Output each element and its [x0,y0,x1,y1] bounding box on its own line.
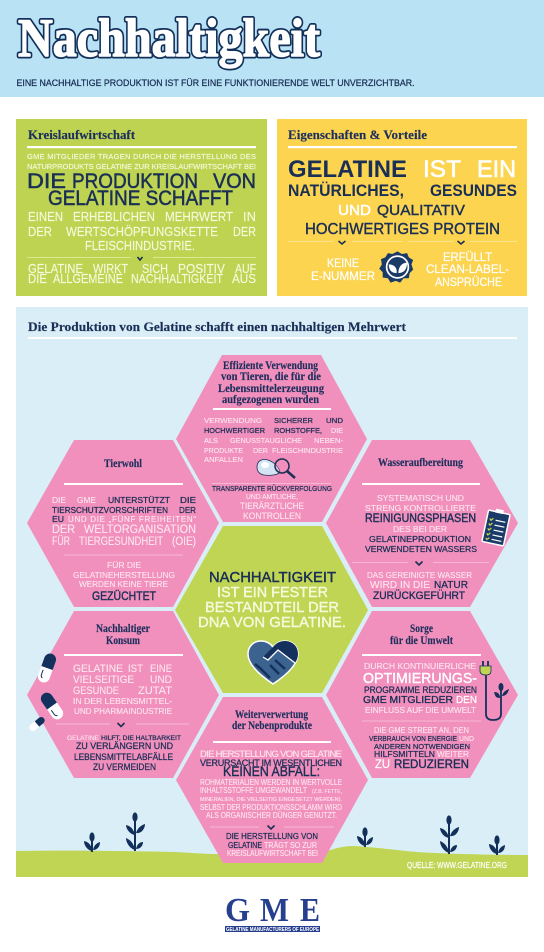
body text: IN DER LEBENSMITTEL- [73,696,172,706]
heading: Sorge [410,623,433,635]
body text: PROGRAMME REDUZIEREN [364,685,477,695]
title: Nachhaltigkeit [18,8,320,68]
conclusion text [226,831,318,858]
logo: GME [225,892,320,933]
icon: plant 2 [126,812,145,851]
heading: Effiziente Verwendung [223,360,318,372]
intro text [27,152,256,171]
arrow [268,826,274,829]
heading: Nachhaltiger [96,623,150,635]
conclusion text: KREISLAUFWIRTSCHAFT BEI [227,849,318,858]
body text: VERWENDETEN WASSERS [365,544,477,554]
body text: SYSTEMATISCH UND [377,493,464,503]
icon: capsule 3 [28,716,46,732]
hexagon: Wasseraufbereitung [326,440,518,607]
conclusion text: KONTROLLEN [243,511,301,521]
heading: nachhaltiger Mehrwert: Die Produktion von Gelatine schafft einen nachhaltigen Mehrwert [28,319,407,334]
heading: Wasseraufbereitung [378,457,463,469]
body text: GENUSSTAUGLICHE [230,436,302,445]
arrow: right [458,241,464,244]
hexagon: effiziente Verwendung [176,355,367,522]
body text: ROHMATERIALIEN WERDEN IN WERTVOLLE [200,778,342,787]
conclusion text [212,484,332,521]
conclusion text: VERBRAUCH VON ENERGIE [369,734,457,743]
heading [96,623,150,647]
conclusion text: GELATINE [67,735,100,742]
icon: capsule 2 [38,690,66,722]
conclusion text: WIRKT [93,262,128,276]
body text: REINIGUNGSPHASEN [365,511,476,525]
statement text [288,156,517,238]
hexagon: Weiterverwertung [176,697,368,863]
body text: DEN [456,694,477,706]
statement text: NACHHALTIGKEIT [209,569,336,586]
text: Clean-Label [426,250,509,289]
body text: (OIE) [172,536,196,548]
heading: aufgezogenen wurden [222,394,320,406]
conclusion text [28,262,256,286]
conclusion text: ALLGEMEINE [53,272,123,286]
conclusion text: AUS [232,272,256,286]
body text: (Z.B. FETTE, [312,789,342,795]
value text: MEHRWERT [165,209,233,224]
body text: UND [150,674,172,686]
panel: Eigenschaften und Vorteile [277,119,527,296]
subtitle: EINE NACHHALTIGE PRODUKTION IST FÜR EINE FUNKTIONIERENDE WELT UNVERZICHTBAR. [16,78,414,89]
body text: DER [52,524,75,536]
heading: Weiterverwertung [235,709,308,721]
heading [232,709,312,732]
conclusion text: HILFSMITTELN [374,749,435,759]
arrow [118,723,124,726]
conclusion text: DIE HERSTELLUNG VON [226,831,318,841]
conclusion text: AUF [235,262,256,276]
heading: Lebensmittelerzeugung [218,383,324,395]
key statement: PRODUKTION [72,170,198,193]
statement text: NATÜRLICHES, [288,181,404,200]
body text: FÜR [52,536,70,548]
title: Nachhaltigkeit [18,8,320,68]
conclusion text: GEZÜCHTET [92,589,157,603]
statement text: IST EIN FESTER [217,584,328,601]
heading [390,623,453,647]
body text: FLEISCHINDUSTRIE [272,446,343,455]
body text: PRODUKTE [204,446,243,455]
panel: nachhaltiger Mehrwert [16,307,528,877]
value text: WERTSCHÖPFUNGSKETTE [66,224,218,239]
value text: DER [28,224,52,239]
text: keine E-Nummer [311,256,375,283]
value text [28,209,256,253]
conclusion text: UND [459,734,475,743]
logo: GME: GELATINE MANUFACTURERS OF EUROPE [226,927,320,933]
conclusion text: POSITIV [178,262,226,276]
body text: DER [179,506,196,515]
statement text: BESTANDTEIL DER [205,599,339,616]
key statement: GELATINE SCHAFFT [48,187,233,210]
text: Clean-Label: ERFÜLLT [443,250,493,264]
body text: GESUNDE [73,685,119,697]
statement text: QUALITATIV [377,202,465,219]
conclusion text: DIE [28,272,47,286]
conclusion text: NATUR [434,580,468,591]
icon: plant 5 [489,835,505,855]
body text: INHALTSSTOFFE UMGEWANDELT [200,786,307,795]
heading [218,360,324,406]
statement text: IST [423,156,461,183]
conclusion text: NACHHALTIGKEIT [131,272,223,286]
hexagon: Tierwohl [27,440,219,607]
body text: GME [77,496,96,505]
body text: UND PHARMAINDUSTRIE [74,706,172,716]
body text: DES BEI DER [393,525,447,534]
conclusion text: ZU [375,757,390,771]
heading: Konsum [106,635,140,647]
body text: ALS [204,436,218,445]
body text: VERWENDUNG [204,416,262,425]
intro text: GME MITGLIEDER TRAGEN DURCH DIE HERSTELLUNG DES [27,152,256,161]
key statement: VON [213,170,256,193]
statement text: GELATINE [288,156,407,183]
body text: EINFLUSS AUF DIE UMWELT [365,706,476,715]
text: Clean-Label: CLEAN-LABEL- [426,262,509,276]
body text: EINE [150,663,172,675]
body text: NEBEN- [314,436,344,445]
conclusion text: ANDEREN NOTWENDIGEN [374,742,470,751]
hexagon: Nachhaltigkeit centre [175,526,368,693]
value text: EINEN [28,209,63,224]
conclusion text: WIRD IN DIE [370,580,430,591]
conclusion text: FÜR DIE [107,560,141,570]
conclusion text: TRANSPARENTE RÜCKVERFOLGUNG [212,484,332,493]
body text [200,749,342,820]
body text: DURCH KONTINUIERLICHE [364,661,476,671]
body text: ROHSTOFFE, [274,426,322,435]
body text: WELTORGANISATION [84,524,196,536]
conclusion text: TIERÄRZTLICHE [240,501,304,511]
body text: VIELSEITIGE [73,674,134,686]
conclusion text: DIE GME STREBT AN, DEN [374,726,469,735]
arrow [416,562,422,565]
body text: ALS ORGANISCHER DÜNGER GENUTZT. [206,811,337,820]
body text: DIE HERSTELLUNG VON GELATINE [200,749,342,760]
conclusion text: HILFT, DIE HALTBARKEIT [101,735,181,742]
icon: capsule 1 [36,652,58,684]
body text: GELATINE [73,663,123,675]
value text: IN [243,209,256,224]
statement text [198,569,346,631]
body text: DER [253,446,269,455]
conclusion text: GELATINE [28,262,83,276]
key statement: DIE [27,170,66,193]
conclusion text: TRÄGT SO ZUR [264,841,317,850]
logo: GME: E [300,892,320,929]
icon: plug with plant [480,661,509,720]
conclusion text [369,726,475,771]
body text: UNTERSTÜTZT [108,496,170,505]
icon: leaf badge [379,251,413,283]
body text: IST [128,663,143,675]
panel: Kreislaufwirtschaft [16,119,267,296]
hexagon: nachhaltiger Konsum [27,611,219,778]
arrow: left [338,241,346,244]
heading: Tierwohl [104,458,142,470]
ground with hills [16,846,528,877]
body text: ANFALLEN [204,455,243,464]
icon: plant 3 [357,827,373,847]
logo: GME: G [225,892,250,929]
body text [365,493,477,554]
heading: Kreislaufwirtschaft: Kreislaufwirtschaft [28,127,136,142]
hexagon: Sorge für die Umwelt [326,611,518,778]
body text: TIERSCHUTZVORSCHRIFTEN [52,506,168,515]
conclusion text: GELATINE [228,841,262,850]
body text: ZUTAT [138,685,172,697]
value text: DER [233,224,256,239]
body text [52,496,196,548]
body text: DIE [180,496,196,505]
key statement [27,170,256,210]
icon: clipboard [482,507,511,546]
text: Clean-Label: ANSPRÜCHE [435,275,502,289]
body text: VERURSACHT IM WESENTLICHEN [200,758,342,768]
intro text: NATURPRODUKTS GELATINE ZUR KREISLAUFWIRTSCHAFT BEI [27,162,256,171]
conclusion text: WERDEN KEINE TIERE [79,579,168,589]
icon: magnifier [257,459,295,478]
body text: OPTIMIERUNGS- [363,670,477,687]
body text [363,661,477,715]
source: QUELLE: WWW.GELATINE.ORG [407,861,507,870]
conclusion text: REDUZIEREN [394,757,469,771]
body text: SELBST DER PRODUKTIONSSCHLAMM WIRD [200,803,342,812]
body text: GME MITGLIEDER [363,694,453,706]
body text [204,416,344,464]
conclusion text: DAS GEREINIGTE WASSER [367,571,472,580]
conclusion text: LEBENSMITTELABFÄLLE [74,752,173,762]
conclusion text: UND AMTLICHE, [246,494,298,501]
body text: UND DIE „FÜNF FREIHEITEN“ [68,515,196,524]
conclusion text [367,571,472,602]
text: keine E-Nummer: KEINE [327,256,359,270]
statement text: HOCHWERTIGES PROTEIN [305,221,500,238]
statement text: DNA VON GELATINE. [198,614,346,631]
icon: handshake heart [248,641,298,684]
statement text: EIN [477,156,516,183]
arrow [138,257,142,260]
statement text: GESUNDES [430,181,517,200]
conclusion text: ZU VERLÄNGERN UND [76,741,173,751]
heading: von Tieren, die für die [221,371,321,383]
conclusion text: ZURÜCKGEFÜHRT [373,590,465,602]
text: keine E-Nummer: E-NUMMER [311,269,375,283]
body text: UND [326,416,344,425]
icon: plant 4 [440,815,459,854]
body text: SICHERER [274,416,314,425]
conclusion text: GELATINEHERSTELLUNG [73,570,175,580]
heading: für die Umwelt [390,635,453,647]
conclusion text [73,560,175,603]
body text: MINERALIEN, DIE VIELSEITIG EINGESETZT WERDEN). [200,797,342,803]
body text: HOCHWERTIGER [204,426,266,435]
body text: GELATINEPRODUKTION [369,534,471,544]
value text: ERHEBLICHEN [73,209,155,224]
body text: DIE [331,426,343,435]
body text: DIE [52,496,66,505]
statement text: UND [338,202,371,219]
conclusion text [67,735,181,772]
conclusion text: SICH [142,262,168,276]
body text: EU [52,515,64,524]
logo: GME: M [260,892,289,929]
heading: Eigenschaften & Vorteile: Eigenschaften & Vorteile [288,127,427,142]
body text: STRENG KONTROLLIERTE [365,503,476,513]
body text [73,663,172,716]
header band [0,0,544,97]
body text: TIERGESUNDHEIT [79,536,163,548]
body text: KEINEN ABFALL: [223,763,320,779]
icon: plant 1 [84,832,100,852]
conclusion text: WEITER [437,749,469,759]
conclusion text: ZU VERMEIDEN [93,762,156,772]
value text: FLEISCHINDUSTRIE. [85,238,195,253]
heading: der Nebenprodukte [232,720,312,732]
